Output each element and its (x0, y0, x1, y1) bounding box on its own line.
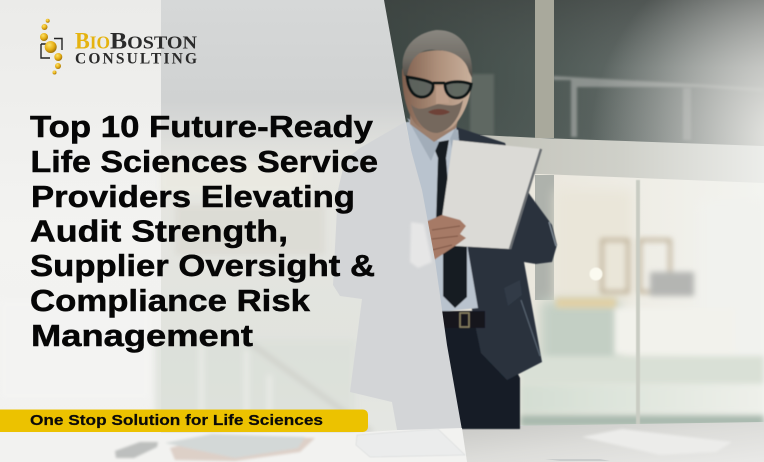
man: hand over document (425, 215, 466, 262)
headline: Supplier Oversight & (30, 248, 375, 283)
man: jacket pocket flap and sleeve sheen (504, 222, 556, 356)
man: jacket (440, 125, 557, 380)
headline: Life Sciences Service (30, 144, 378, 179)
logo icon: bracket and gold spheres (40, 19, 62, 74)
man: shirt (405, 122, 478, 312)
overlay: ghost background detail (0, 163, 372, 432)
headline: Compliance Risk (30, 283, 311, 318)
man: shirt collar (407, 118, 459, 161)
table surface (440, 422, 764, 462)
logo: BioBoston Consulting (40, 19, 197, 74)
overlay: ghost phone (115, 442, 158, 458)
headline: Top 10 Future-Ready (30, 109, 374, 144)
man: glasses (407, 77, 471, 98)
overlay: ghost man jacket (333, 122, 462, 430)
man: tie (432, 140, 467, 308)
overlay: ghost notebook (165, 434, 315, 461)
logo wordmark gold part: BIO (75, 28, 110, 54)
headline: Management (31, 318, 253, 353)
man in suit (402, 30, 557, 429)
man: hair (402, 30, 472, 78)
headline (30, 109, 378, 353)
background office photo (380, 0, 764, 427)
man: beard (411, 100, 463, 133)
overlay: ghost papers on table (356, 429, 465, 457)
logo wordmark dark part: BOSTON (110, 28, 197, 54)
man: neck (410, 112, 460, 142)
overlay: ghost table (0, 428, 467, 462)
headline: Providers Elevating (31, 179, 355, 214)
man: document spine (510, 149, 541, 249)
man: mouth (428, 109, 450, 115)
headline: Audit Strength, (30, 214, 288, 248)
man: document (438, 140, 541, 249)
man: belt (441, 311, 485, 328)
tagline text: One Stop Solution for Life Sciences (30, 412, 323, 429)
man: nose (436, 86, 449, 104)
man: trousers (430, 320, 520, 429)
white diagonal overlay panel (0, 0, 467, 462)
logo subtitle: CONSULTING (75, 50, 197, 68)
tagline bar (0, 410, 368, 432)
overlay: ghost hand highlight (410, 222, 432, 268)
man: face (402, 50, 472, 132)
